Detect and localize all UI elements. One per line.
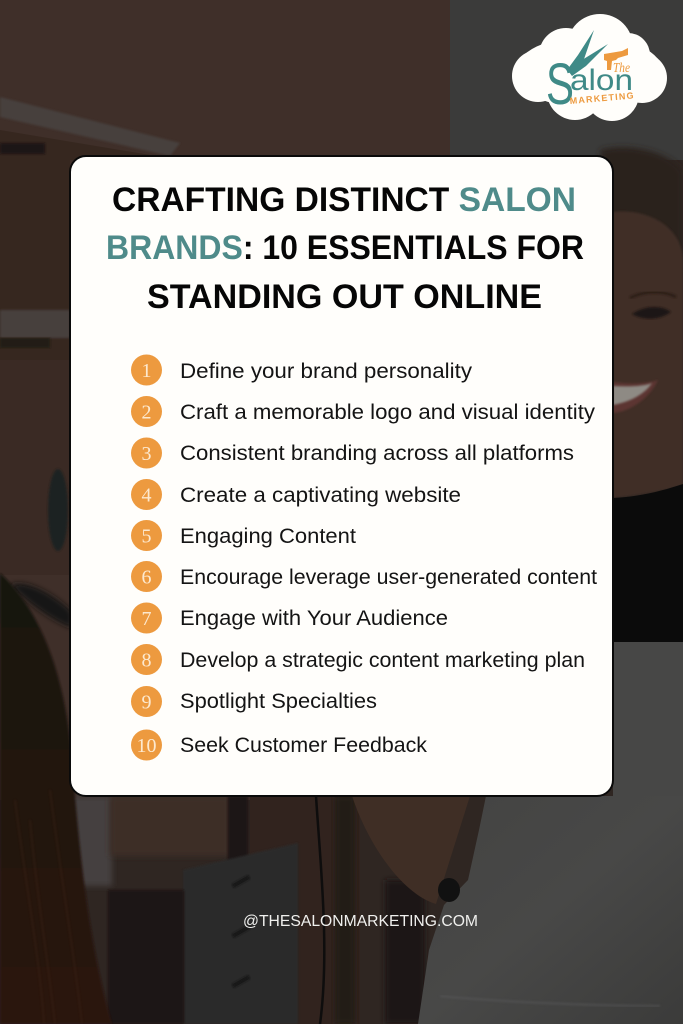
list: number badges: 10 [136, 735, 156, 757]
logo word: Marketing: MARKETING [569, 90, 634, 106]
footer: website handle: @THESALONMARKETING.COM [243, 913, 478, 930]
list: items: Create a captivating website [180, 484, 461, 507]
list: items: Encourage leverage user-generated content [180, 566, 597, 589]
list: number badges: 7 [142, 608, 152, 630]
heading [106, 181, 584, 316]
list: items: Engage with Your Audience [180, 607, 448, 630]
list: number badges: 9 [142, 692, 152, 714]
icon: hair dryer [604, 48, 628, 70]
heading: CRAFTING DISTINCT SALON [112, 181, 576, 219]
list: number badges: 4 [142, 484, 152, 506]
list: items: Engaging Content [180, 525, 356, 548]
list: items [180, 360, 597, 757]
list: items: Craft a memorable logo and visual identity [180, 401, 596, 424]
logo word: alon: alon [570, 64, 633, 97]
icon: scissors [567, 30, 608, 76]
list: number badges: 1 [142, 360, 152, 382]
list: items: Spotlight Specialties [180, 690, 377, 713]
list: number badges: 3 [142, 443, 152, 465]
list: number badges: 5 [142, 526, 152, 548]
background: arm and apron [352, 796, 683, 1024]
list: number badges: 8 [142, 650, 152, 672]
background: drawer cabinet [108, 843, 298, 1024]
list: items: Consistent branding across all platforms [180, 442, 574, 465]
list: number badges: 6 [142, 566, 152, 588]
logo: white cloud badge [512, 14, 667, 121]
list: number badges: 2 [142, 402, 152, 424]
background: long hair at lower left [0, 573, 112, 1024]
panel: white card [70, 156, 613, 796]
heading: STANDING OUT ONLINE [147, 278, 542, 316]
logo letter: S: S [546, 52, 574, 117]
list: items: Define your brand personality [180, 360, 473, 383]
heading: BRANDS: 10 ESSENTIALS FOR [106, 229, 584, 267]
list: number badges [131, 354, 162, 760]
background: stylist hair, face and clothing [600, 147, 683, 802]
list: items: Develop a strategic content marketing plan [180, 649, 585, 672]
list: items: Seek Customer Feedback [180, 734, 427, 757]
logo word: The: The [613, 61, 630, 76]
